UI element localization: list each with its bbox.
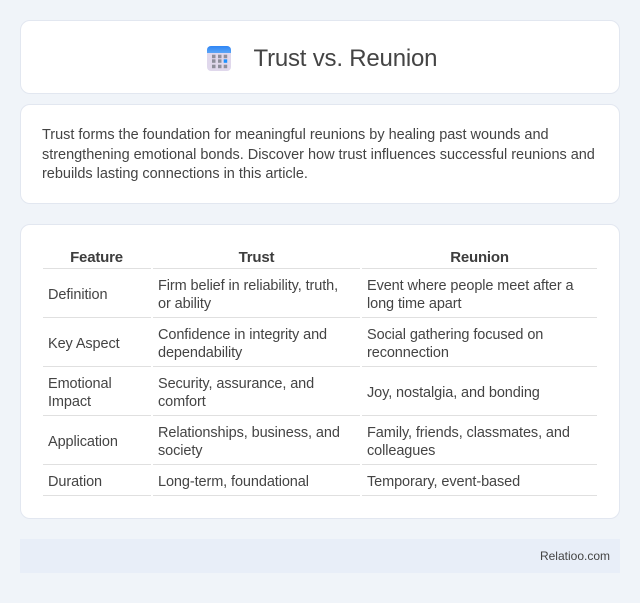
row: Emotional Impact: Joy, nostalgia, and bonding [367, 385, 540, 401]
row: Key Aspect: Confidence in integrity and [158, 327, 327, 343]
row: Key Aspect: dependability [158, 345, 242, 361]
row: Application: Application [48, 434, 118, 450]
row: Duration [48, 474, 520, 490]
row: Emotional Impact: Impact [48, 394, 91, 410]
row: Definition: Definition [48, 287, 107, 303]
row: Emotional Impact: Emotional [48, 376, 112, 392]
title: Trust vs. Reunion [254, 45, 437, 72]
panel: title header [20, 20, 620, 94]
row: Duration: Long-term, foundational [158, 474, 309, 490]
row: Key Aspect [48, 327, 543, 361]
row: Application: Relationships, business, and [158, 425, 340, 441]
table header: Reunion: Reunion [450, 249, 509, 266]
row: Definition: long time apart [367, 296, 461, 312]
table header: Feature: Feature [70, 249, 123, 266]
intro text: Trust forms the foundation for meaningful reunions by healing past wounds and [42, 127, 549, 143]
row: Definition: Firm belief in reliability, truth, [158, 278, 338, 294]
row: Application: colleagues [367, 443, 435, 459]
intro text: strengthening emotional bonds. Discover how trust influences successful reunions and [42, 146, 595, 162]
icon: calendar [207, 46, 231, 71]
row: Application [48, 425, 570, 459]
row: Definition: Event where people meet after a [367, 278, 573, 294]
footer credit: Relatioo.com [540, 549, 610, 563]
row: Emotional Impact [48, 376, 540, 410]
row: Application: society [158, 443, 202, 459]
row: Application: Family, friends, classmates, and [367, 425, 570, 441]
row: Key Aspect: reconnection [367, 345, 449, 361]
row: Emotional Impact: Security, assurance, and [158, 376, 314, 392]
row: Definition: or ability [158, 296, 211, 312]
row: Definition [48, 278, 574, 312]
row: Key Aspect: Social gathering focused on [367, 327, 543, 343]
intro text: rebuilds lasting connections in this article. [42, 166, 308, 182]
intro text [42, 127, 595, 182]
row: Duration: Duration [48, 474, 102, 490]
panel: comparison table [20, 224, 620, 519]
table header: Trust: Trust [239, 249, 274, 266]
comparison table [43, 249, 597, 496]
row: Emotional Impact: comfort [158, 394, 206, 410]
panel: introduction [20, 104, 620, 204]
footer bar [20, 539, 620, 573]
row: Duration: Temporary, event-based [367, 474, 520, 490]
row: Key Aspect: Key Aspect [48, 336, 120, 352]
